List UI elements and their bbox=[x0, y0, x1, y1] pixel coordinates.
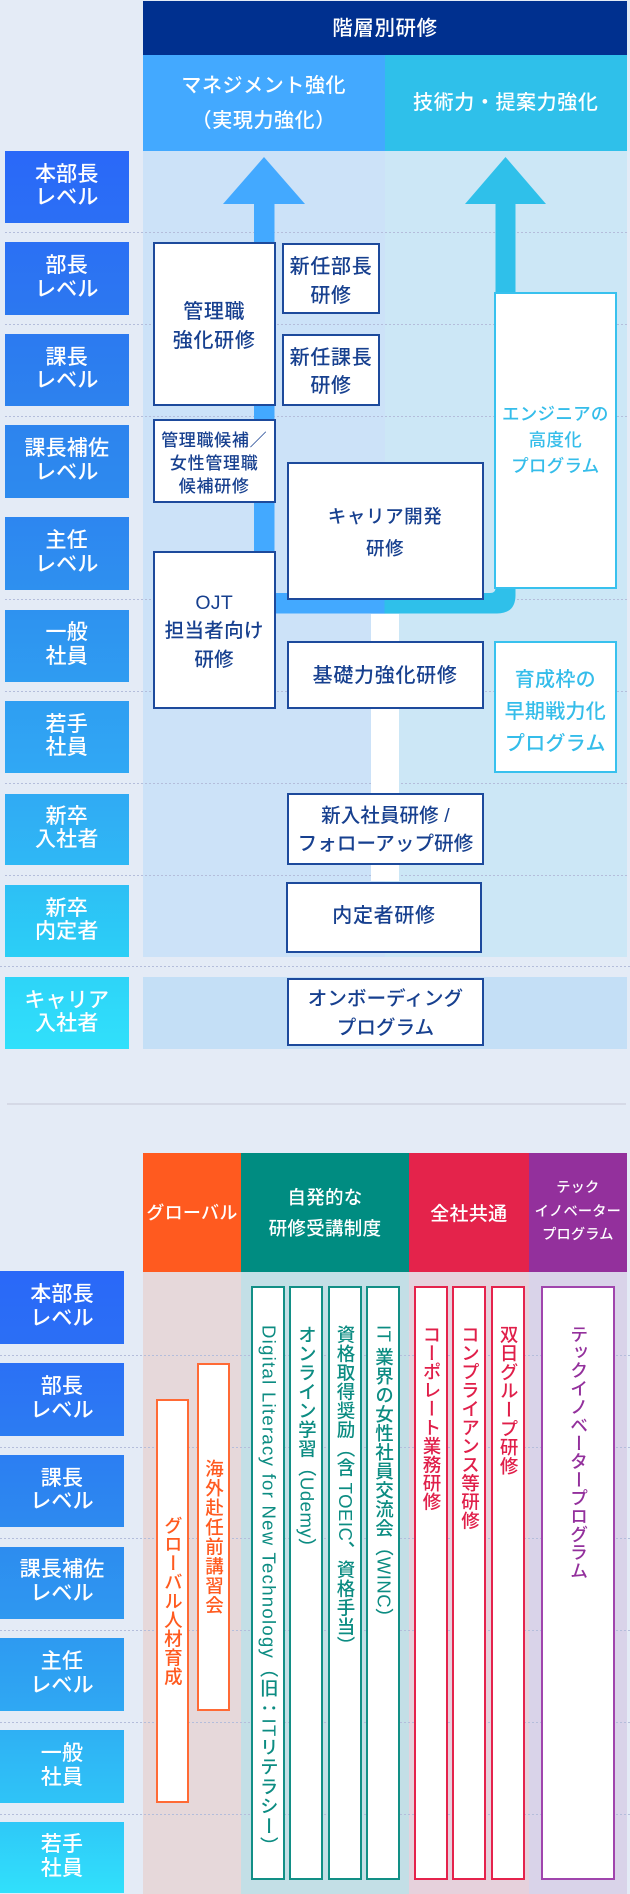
label: young staff bbox=[0, 1822, 124, 1893]
box: new section head training: 新任課長 bbox=[290, 346, 372, 368]
box: fundamentals training bbox=[286, 641, 484, 709]
box: pre-assignment seminar bbox=[196, 1363, 230, 1711]
label: chief level: 主任 bbox=[41, 1650, 83, 1673]
box: new employee training bbox=[287, 793, 484, 865]
label: department head level bbox=[5, 242, 128, 315]
label: young staff: 社員 bbox=[41, 1857, 83, 1880]
panel: career hire row background bbox=[143, 977, 627, 1049]
box: pre-assignment seminar: 海外赴任前講習会 bbox=[204, 1459, 224, 1615]
heading: global bbox=[143, 1153, 241, 1272]
heading: tech innovator program: プログラム bbox=[542, 1227, 614, 1243]
heading: tech innovator program bbox=[529, 1153, 627, 1272]
box: compliance training bbox=[452, 1286, 486, 1880]
label: assistant section head level: 課長補佐 bbox=[20, 1558, 104, 1581]
box: onboarding program: プログラム bbox=[337, 1017, 434, 1039]
white vertical connector band bbox=[371, 614, 398, 881]
box: corporate training bbox=[414, 1286, 448, 1880]
box: career development training: 研修 bbox=[366, 538, 404, 559]
label: young staff: 社員 bbox=[46, 736, 88, 759]
heading: technical and proposal strengthening bbox=[384, 55, 627, 151]
box: engineer advancement program: プログラム bbox=[511, 456, 600, 476]
label: chief level bbox=[5, 517, 128, 590]
box: OJT trainer training: 担当者向け bbox=[165, 620, 264, 642]
box: women in IT exchange: IT 業界の女性社員交流会（WINC） bbox=[373, 1325, 394, 1627]
heading: management strengthening: （実現力強化） bbox=[192, 110, 336, 132]
label: chief level: レベル bbox=[30, 1674, 94, 1697]
panel: company-wide background bbox=[409, 1272, 529, 1894]
heading: global: グローバル bbox=[146, 1203, 238, 1223]
label: assistant section head level bbox=[5, 425, 128, 498]
box: women in IT exchange bbox=[366, 1286, 400, 1880]
label: section head level: レベル bbox=[30, 1490, 94, 1513]
box: global talent development bbox=[156, 1399, 189, 1803]
box: career development training: キャリア開発 bbox=[328, 506, 442, 527]
box: OJT trainer training: OJT bbox=[195, 592, 233, 614]
box: new employee training: フォローアップ研修 bbox=[298, 833, 473, 855]
arrow: technical path bbox=[384, 157, 546, 614]
box: engineer advancement program: 高度化 bbox=[529, 430, 582, 450]
box: manager strengthening training bbox=[153, 242, 276, 406]
label: section head level bbox=[0, 1455, 124, 1527]
box: tech innovator program bbox=[541, 1286, 615, 1880]
label: department head level: 部長 bbox=[46, 254, 88, 277]
box: certification support bbox=[328, 1286, 362, 1880]
box: two-day group training: 双日グループ研修 bbox=[498, 1325, 519, 1475]
box: early development program: 育成枠の bbox=[515, 669, 596, 691]
heading: management strengthening bbox=[143, 55, 384, 151]
box: engineer advancement program: エンジニアの bbox=[502, 404, 609, 424]
box: global talent development: グローバル人材育成 bbox=[162, 1516, 183, 1686]
label: executive level: レベル bbox=[30, 1307, 94, 1330]
section: tiered training chart bbox=[0, 1, 630, 1049]
arrow: management path bbox=[223, 157, 384, 614]
label: section head level: 課長 bbox=[46, 346, 88, 368]
box: certification support: 資格取得奨励（含 TOEIC、資格手当） bbox=[335, 1325, 356, 1655]
box: manager strengthening training: 管理職 bbox=[183, 301, 245, 323]
box: career development training bbox=[286, 462, 484, 600]
box: manager candidate training: 候補研修 bbox=[179, 477, 250, 496]
box: OJT trainer training: 研修 bbox=[194, 648, 234, 670]
box: early development program: 早期戦力化 bbox=[505, 701, 606, 723]
heading: tech innovator program: イノベーター bbox=[535, 1204, 621, 1220]
box: manager candidate training bbox=[153, 419, 276, 503]
label: general staff bbox=[5, 610, 128, 682]
box: new employee training: 新入社員研修 / bbox=[321, 805, 450, 827]
heading: self-directed training: 研修受講制度 bbox=[269, 1218, 381, 1239]
box: early development program: プログラム bbox=[505, 733, 606, 755]
label: executive level bbox=[0, 1271, 124, 1344]
label: young staff: 若手 bbox=[41, 1833, 83, 1856]
label: mid-career hires bbox=[5, 977, 128, 1049]
box: tech innovator program: テックイノベータープログラム bbox=[568, 1325, 588, 1580]
label: section head level: レベル bbox=[35, 369, 99, 392]
heading: self-directed training bbox=[241, 1153, 409, 1272]
box: corporate training: コーポレート業務研修 bbox=[421, 1325, 442, 1511]
box: compliance training: コンプライアンス等研修 bbox=[459, 1325, 480, 1530]
label: chief level bbox=[0, 1638, 124, 1711]
label: chief level: 主任 bbox=[46, 529, 88, 552]
box: fundamentals training: 基礎力強化研修 bbox=[313, 665, 458, 687]
box: engineer advancement program bbox=[494, 292, 617, 589]
box: new section head training bbox=[282, 334, 380, 406]
label: mid-career hires: キャリア bbox=[24, 988, 109, 1012]
label: department head level: レベル bbox=[30, 1399, 94, 1422]
box: manager candidate training: 女性管理職 bbox=[170, 454, 258, 473]
box: digital literacy bbox=[251, 1286, 285, 1880]
heading: management strengthening: マネジメント強化 bbox=[181, 75, 346, 97]
label: general staff: 社員 bbox=[41, 1766, 83, 1789]
label: chief level: レベル bbox=[35, 552, 99, 576]
box: manager strengthening training: 強化研修 bbox=[173, 330, 256, 352]
box: manager candidate training: 管理職候補／ bbox=[161, 431, 267, 450]
heading: tech innovator program: テック bbox=[556, 1180, 599, 1196]
label: department head level: 部長 bbox=[41, 1375, 83, 1398]
box: digital literacy: Digital Literacy for New Technology（旧：ITリテラシー） bbox=[258, 1325, 279, 1856]
label: mid-career hires: 入社者 bbox=[35, 1012, 99, 1035]
heading: company-wide bbox=[409, 1153, 529, 1272]
label: assistant section head level: 課長補佐 bbox=[24, 437, 109, 460]
heading: tiered training bbox=[143, 1, 627, 55]
label: assistant section head level: レベル bbox=[30, 1582, 94, 1605]
panel: tech innovator background bbox=[529, 1272, 627, 1894]
panel: self-directed background bbox=[241, 1272, 409, 1894]
box: offeree training: 内定者研修 bbox=[332, 905, 436, 927]
label: department head level: レベル bbox=[35, 278, 99, 300]
label: new graduate hires: 入社者 bbox=[35, 828, 99, 851]
box: onboarding program: オンボーディング bbox=[308, 988, 463, 1010]
label: executive level bbox=[5, 151, 128, 223]
box: two-day group training bbox=[491, 1286, 525, 1880]
box: new section head training: 研修 bbox=[310, 375, 352, 397]
label: section head level bbox=[5, 334, 128, 406]
arrows: growth paths bbox=[223, 157, 546, 614]
heading: tiered training: 階層別研修 bbox=[332, 16, 438, 40]
panel: technical column background bbox=[384, 151, 627, 957]
label: new graduate hires bbox=[5, 794, 128, 865]
label: executive level: 本部長 bbox=[35, 162, 99, 186]
label: young staff bbox=[5, 701, 128, 773]
box: online learning: オンライン学習（Udemy） bbox=[296, 1325, 317, 1557]
heading: technical and proposal strengthening: 技術力・提案力強化 bbox=[413, 92, 598, 114]
label: assistant section head level: レベル bbox=[35, 460, 99, 484]
heading: company-wide: 全社共通 bbox=[430, 1204, 507, 1225]
box: onboarding program bbox=[287, 978, 484, 1046]
box: online learning bbox=[289, 1286, 323, 1880]
label: new graduate hires: 新卒 bbox=[46, 805, 88, 828]
box: offeree training bbox=[286, 882, 482, 953]
panel: management column background bbox=[143, 151, 384, 957]
label: general staff: 一般 bbox=[46, 621, 88, 644]
label: assistant section head level bbox=[0, 1547, 124, 1619]
label: new graduate offerees: 内定者 bbox=[35, 920, 99, 943]
box: new department head training: 新任部長 bbox=[290, 256, 372, 278]
label: general staff: 一般 bbox=[41, 1742, 83, 1765]
heading: self-directed training: 自発的な bbox=[287, 1187, 363, 1208]
label: department head level bbox=[0, 1363, 124, 1436]
box: new department head training: 研修 bbox=[310, 285, 352, 307]
label: new graduate offerees: 新卒 bbox=[46, 896, 88, 920]
label: executive level: レベル bbox=[35, 186, 99, 209]
box: early development program bbox=[494, 641, 617, 772]
box: new department head training bbox=[282, 243, 380, 314]
label: young staff: 若手 bbox=[46, 712, 88, 736]
panel: global background bbox=[143, 1272, 241, 1894]
label: section head level: 課長 bbox=[41, 1467, 83, 1490]
label: new graduate offerees bbox=[5, 885, 128, 957]
label: executive level: 本部長 bbox=[30, 1283, 94, 1306]
box: OJT trainer training bbox=[153, 550, 276, 709]
label: general staff bbox=[0, 1730, 124, 1803]
label: general staff: 社員 bbox=[46, 645, 88, 668]
